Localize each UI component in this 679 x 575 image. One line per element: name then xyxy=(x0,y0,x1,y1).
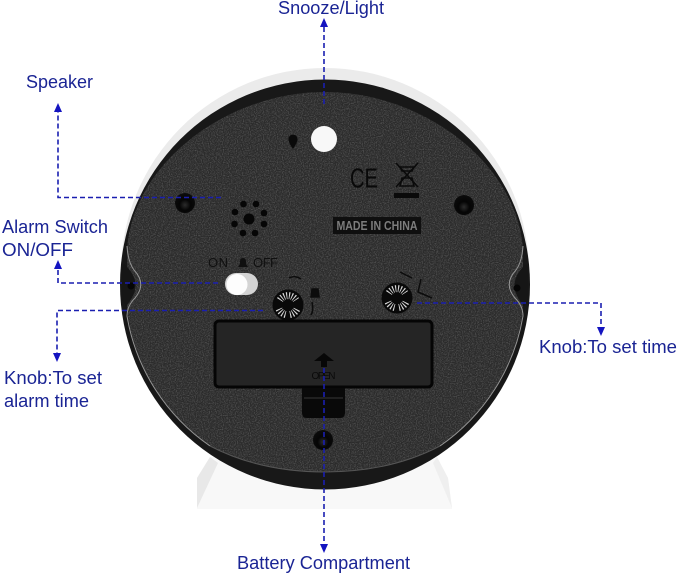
label: alarm switch xyxy=(2,217,108,260)
label: speaker: Speaker xyxy=(26,72,93,92)
battery compartment cover xyxy=(215,321,432,418)
label: time knob: Knob:To set time xyxy=(539,337,677,357)
alarm set knob xyxy=(272,290,304,320)
arrow: snooze light xyxy=(320,18,328,104)
label: alarm time knob xyxy=(4,368,102,411)
arrow: speaker xyxy=(54,103,221,198)
clock back panel xyxy=(120,80,530,490)
edge highlight xyxy=(127,246,523,446)
textured surface xyxy=(120,85,530,485)
side notches xyxy=(122,264,136,306)
CE mark: CE xyxy=(350,162,378,194)
label: battery compartment: Battery Compartment xyxy=(237,553,410,573)
arrow: time knob xyxy=(417,303,605,336)
time set knob xyxy=(382,282,412,314)
label: alarm switch: ON/OFF xyxy=(2,240,73,260)
WEEE bin symbol xyxy=(394,163,419,198)
arrow: battery compartment xyxy=(320,368,328,553)
clock stand xyxy=(197,457,452,509)
white clock body rim xyxy=(121,68,529,476)
speaker holes xyxy=(231,201,267,236)
arrow: alarm time knob xyxy=(53,310,263,362)
snooze light button xyxy=(311,126,337,152)
label: alarm time knob: alarm time xyxy=(4,391,89,411)
made in china badge: MADE IN CHINA xyxy=(336,219,418,233)
alarm switch marking: ON xyxy=(208,255,228,270)
time knob markings xyxy=(400,272,432,298)
screw holes xyxy=(175,193,474,450)
arrow: alarm switch xyxy=(54,260,218,283)
alarm switch marking: OFF xyxy=(253,255,278,270)
light indicator icon xyxy=(288,134,298,149)
label: alarm switch: Alarm Switch xyxy=(2,217,108,237)
alarm switch marking xyxy=(208,255,278,270)
label: alarm time knob: Knob:To set xyxy=(4,368,102,388)
alarm switch xyxy=(225,273,258,295)
alarm knob markings xyxy=(289,277,319,315)
battery compartment cover: OPEN xyxy=(312,371,336,382)
